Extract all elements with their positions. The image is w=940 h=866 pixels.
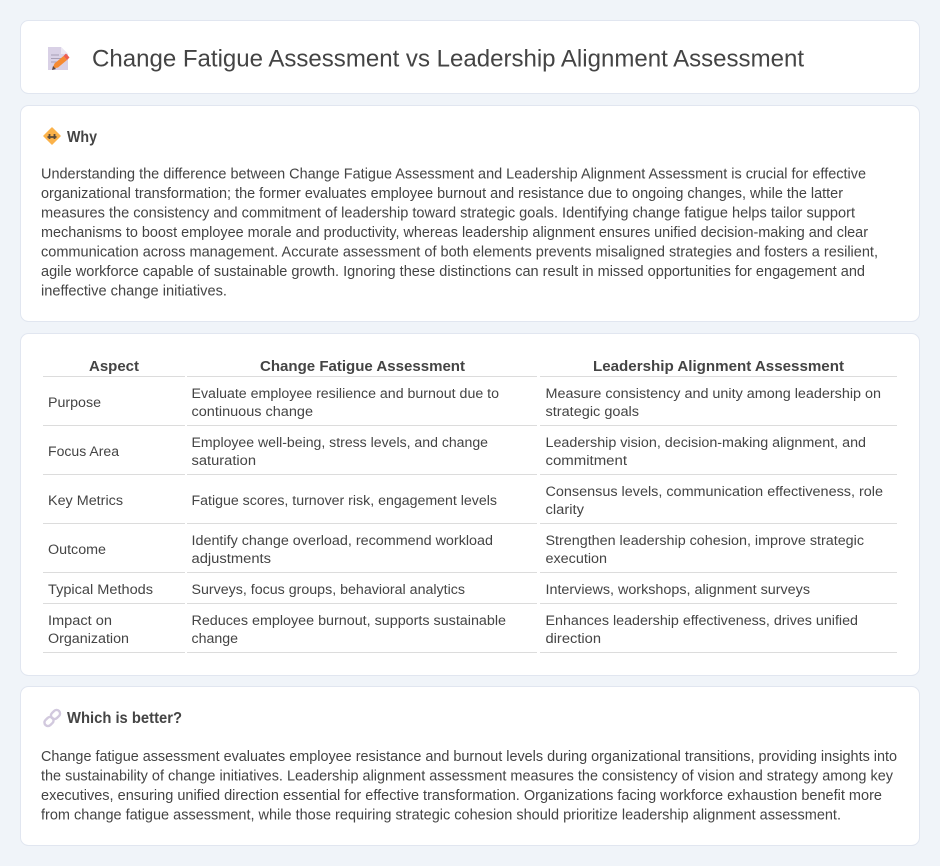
table row: key metrics: clarity <box>546 502 585 518</box>
table row: outcome: Strengthen leadership cohesion, improve strategic <box>546 533 864 549</box>
title: Change Fatigue Assessment vs Leadership Alignment Assessment <box>92 46 804 72</box>
table row: typical methods: Surveys, focus groups, behavioral analytics <box>192 582 465 598</box>
panel: why <box>20 106 920 322</box>
table row: focus area <box>48 435 866 469</box>
text block: which is better paragraph <box>41 749 897 824</box>
text block: why paragraph: organizational transformation; the former evaluates employee burnout and resistance due to ongoing changes, while the latter <box>41 186 843 202</box>
table row: purpose: Evaluate employee resilience and burnout due to <box>192 386 499 402</box>
table row: impact on organization <box>48 613 858 647</box>
table row: impact on organization: Impact on <box>48 613 112 629</box>
table row: impact on organization: change <box>192 631 238 647</box>
icon: orange diamond sign <box>44 128 60 144</box>
table header row: Leadership Alignment Assessment <box>593 358 844 375</box>
table row: impact on organization: Reduces employee burnout, supports sustainable <box>192 613 506 629</box>
table row: key metrics <box>48 484 883 518</box>
text block: why paragraph: Understanding the difference between Change Fatigue Assessment and Leadership Alignment Assessment is crucial for effective <box>41 166 866 182</box>
panel: which is better <box>20 686 920 846</box>
table row: key metrics: Consensus levels, communication effectiveness, role <box>546 484 883 500</box>
text block: why paragraph: mechanisms to boost employee morale and productivity, whereas leadership alignment ensures unified decision-making and clear <box>41 225 868 241</box>
table row: impact on organization: Organization <box>48 631 129 647</box>
icon: document with pencil <box>48 47 70 70</box>
panel: comparison table <box>20 334 920 676</box>
table row: focus area: Leadership vision, decision-making alignment, and <box>546 435 866 451</box>
table row: focus area: Focus Area <box>48 444 119 460</box>
text block: why paragraph: measures the consistency and commitment of leadership toward strategic goals. Identifying change fatigue helps tailor support <box>41 206 855 222</box>
table row: purpose: strategic goals <box>546 404 639 420</box>
table row: outcome: Identify change overload, recommend workload <box>192 533 493 549</box>
table row: typical methods: Interviews, workshops, alignment surveys <box>546 582 810 598</box>
icon: chain link <box>43 708 62 728</box>
table row: key metrics: Fatigue scores, turnover risk, engagement levels <box>192 493 497 509</box>
text block: why paragraph: communication across management. Accurate assessment of both elements prevents misaligned strategies and fosters a resilient, <box>41 244 878 260</box>
text block: why paragraph: agile workforce capable of sustainable growth. Ignoring these distinctions can result in missed opportunities for engagement and <box>41 264 865 280</box>
table row: focus area: saturation <box>192 453 256 469</box>
table header row <box>89 358 844 375</box>
table row: purpose: continuous change <box>192 404 313 420</box>
table row: focus area: Employee well-being, stress levels, and change <box>192 435 488 451</box>
table row: outcome: Outcome <box>48 542 106 558</box>
text block: why paragraph: ineffective change initiatives. <box>41 284 227 300</box>
table row: typical methods: Typical Methods <box>48 582 153 598</box>
table row: outcome: adjustments <box>192 551 271 567</box>
table header row: Aspect <box>89 358 139 375</box>
table row: purpose <box>48 386 881 420</box>
heading: why: Why <box>67 129 97 146</box>
text block: which is better paragraph: Change fatigue assessment evaluates employee resistance and burnout levels during organizational transitions, providing insights into <box>41 749 897 765</box>
table row: impact on organization: direction <box>546 631 601 647</box>
text block: which is better paragraph: the sustainability of change initiatives. Leadership alignment assessment measures the consistency of vision and strategy among key <box>41 768 894 784</box>
table row: impact on organization: Enhances leadership effectiveness, drives unified <box>546 613 858 629</box>
table row: focus area: commitment <box>546 453 627 469</box>
table row: purpose: Purpose <box>48 395 101 411</box>
text block: why paragraph <box>41 166 878 300</box>
table row: outcome <box>48 533 864 567</box>
text block: which is better paragraph: from change fatigue assessment, while those requiring strategic cohesion should prioritize leadership alignment assessment. <box>41 808 841 824</box>
text block: which is better paragraph: executives, ensuring unified direction essential for effective transformation. Organizations facing workforce exhaustion benefit more <box>41 788 882 804</box>
table row: purpose: Measure consistency and unity among leadership on <box>546 386 881 402</box>
table row: key metrics: Key Metrics <box>48 493 123 509</box>
table row: typical methods <box>48 582 810 598</box>
table row: outcome: execution <box>546 551 607 567</box>
heading: which is better: Which is better? <box>67 710 182 727</box>
panel: header <box>20 20 920 94</box>
table header row: Change Fatigue Assessment <box>260 358 465 375</box>
